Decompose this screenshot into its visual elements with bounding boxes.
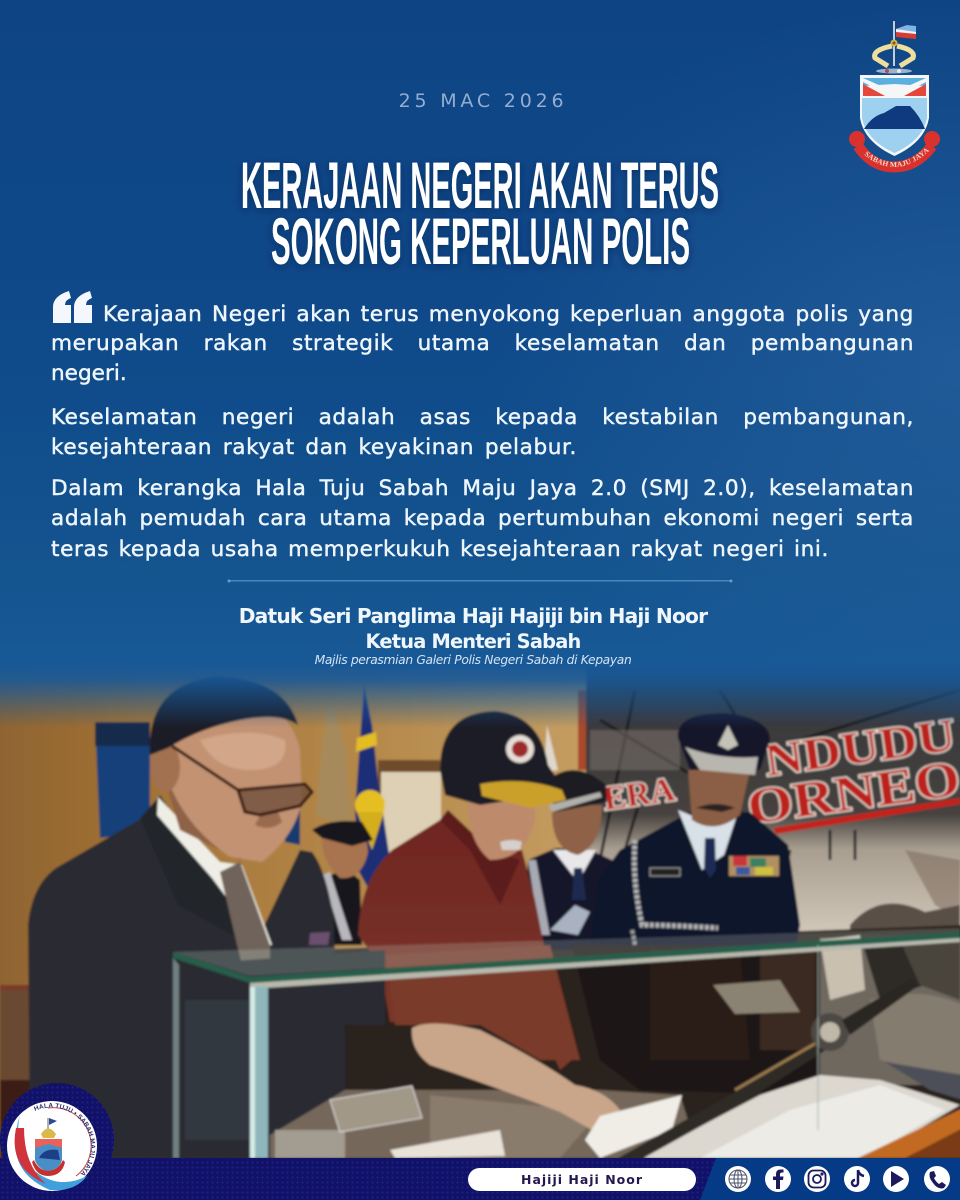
icon: opening quotation mark <box>53 291 92 323</box>
neck <box>165 780 265 860</box>
white labels <box>585 1095 682 1158</box>
icon: instagram <box>808 1170 826 1188</box>
glasses <box>172 746 312 815</box>
background: blue gradient <box>0 0 960 720</box>
maroon shirt seen through glass <box>385 945 580 1060</box>
icon: facebook <box>773 1170 784 1189</box>
photo: senior police officer <box>550 713 800 975</box>
paragraph 1: Kerajaan Negeri akan terus menyokong keperluan anggota polis yang <box>103 302 914 327</box>
aiglet cord <box>634 840 718 928</box>
photo: banner text: ERA <box>601 771 678 818</box>
crest: wreath <box>876 68 912 74</box>
artefact tray <box>330 1086 422 1132</box>
icon: play <box>891 1171 904 1187</box>
photo: banner text: NDUDU <box>761 709 959 786</box>
crest: motto ribbon <box>849 131 940 172</box>
photo: wall <box>0 666 620 1160</box>
photo: dark figure in banner <box>850 904 960 940</box>
icon: globe <box>729 1170 747 1188</box>
tie <box>220 862 270 970</box>
crest: motto ribbon: SABAH MAJU JAYA <box>864 148 930 167</box>
footer bar: navy <box>0 1158 960 1200</box>
paragraph 3: adalah pemudah cara utama kepada pertumbuhan ekonomi negeri serta <box>51 506 914 531</box>
paragraph 2: Keselamatan negeri adalah asas kepada kestabilan pembangunan, <box>51 405 914 430</box>
paragraph 3 <box>51 476 914 562</box>
photo: officer behind at left <box>312 821 373 945</box>
badge mini crest <box>32 1118 65 1176</box>
photo: banner text: ORNEO <box>744 750 960 835</box>
footer name pill: Hajiji Haji Noor <box>521 1172 643 1187</box>
photo: man in suit <box>28 676 340 1160</box>
quote text block <box>51 302 914 562</box>
framed item in case <box>713 980 800 1014</box>
badge ring text: HALA TUJU • SABAH MAJU JAYA <box>34 1103 96 1176</box>
head <box>160 695 302 862</box>
photo: glass case lid and edges <box>173 928 960 1158</box>
photo: blue doorway <box>95 722 150 838</box>
photo: officials viewing a glass display case <box>0 664 960 1160</box>
photo: exhibition banner <box>586 666 960 935</box>
photo: beige flag behind <box>316 700 352 830</box>
sword <box>618 1038 835 1160</box>
wood base <box>858 1108 960 1158</box>
divider <box>228 580 732 582</box>
pocket square <box>309 932 330 945</box>
paragraph 1: negeri. <box>51 361 127 386</box>
table surface <box>270 1090 700 1158</box>
paragraph 1 <box>51 302 914 386</box>
forearm and hand <box>412 1023 620 1130</box>
white cloth <box>640 1075 960 1158</box>
footer: right blue panel <box>700 1158 960 1200</box>
icon: phone <box>929 1171 946 1188</box>
paragraph 3: teras kepada usaha memperkukuh kesejahteraan rakyat negeri ini. <box>51 537 829 562</box>
event caption: Majlis perasmian Galeri Polis Negeri Sabah di Kepayan <box>315 653 631 667</box>
footer name pill <box>468 1168 696 1191</box>
paragraph 2 <box>51 405 914 460</box>
paragraph 1: merupakan rakan strategik utama keselamatan dan pembangunan <box>51 331 914 356</box>
photo: Malaysian flag <box>355 685 390 895</box>
speaker role: Ketua Menteri Sabah <box>366 630 580 653</box>
dark interior <box>572 945 820 1095</box>
photo: framed notice <box>378 760 441 856</box>
name tag <box>650 868 680 876</box>
suit jacket <box>28 795 340 1160</box>
photo: banner scaffolding <box>600 690 960 930</box>
attribution <box>239 604 708 667</box>
photo: display case interior <box>180 935 960 1160</box>
title <box>241 148 719 278</box>
crest: shield <box>860 75 929 156</box>
suit seen through glass <box>180 950 385 1158</box>
photo: small white flag <box>544 725 558 772</box>
photo: man in maroon shirt and cap <box>358 711 574 1070</box>
photo: top blue fade <box>0 664 960 728</box>
badge: Hala Tuju Sabah Maju Jaya <box>0 1083 114 1191</box>
shirt collar <box>157 797 272 945</box>
medal ribbons <box>729 856 779 876</box>
date: 25 MAC 2026 <box>399 90 567 112</box>
photo: officer centre-right behind <box>524 770 612 950</box>
photo: display case base layer <box>173 925 960 1160</box>
paragraph 3: Dalam kerangka Hala Tuju Sabah Maju Jaya 2.0 (SMJ 2.0), keselamatan <box>51 476 914 501</box>
photo: banner text <box>601 709 960 835</box>
icon: tiktok <box>852 1170 864 1186</box>
crest: flagpole and flag <box>894 21 916 66</box>
speaker name: Datuk Seri Panglima Haji Hajiji bin Haji Noor <box>239 604 707 628</box>
paragraph 2: kesejahteraan rakyat dan keyakinan pelabur. <box>51 435 577 460</box>
hair <box>150 676 298 755</box>
footer icons <box>725 1166 950 1192</box>
crest: Sabah state arms <box>849 21 940 172</box>
photo: lower left skirting <box>0 985 40 1160</box>
crest: arms holding the pole <box>875 40 913 66</box>
sepia figures behind glass <box>820 938 960 1085</box>
